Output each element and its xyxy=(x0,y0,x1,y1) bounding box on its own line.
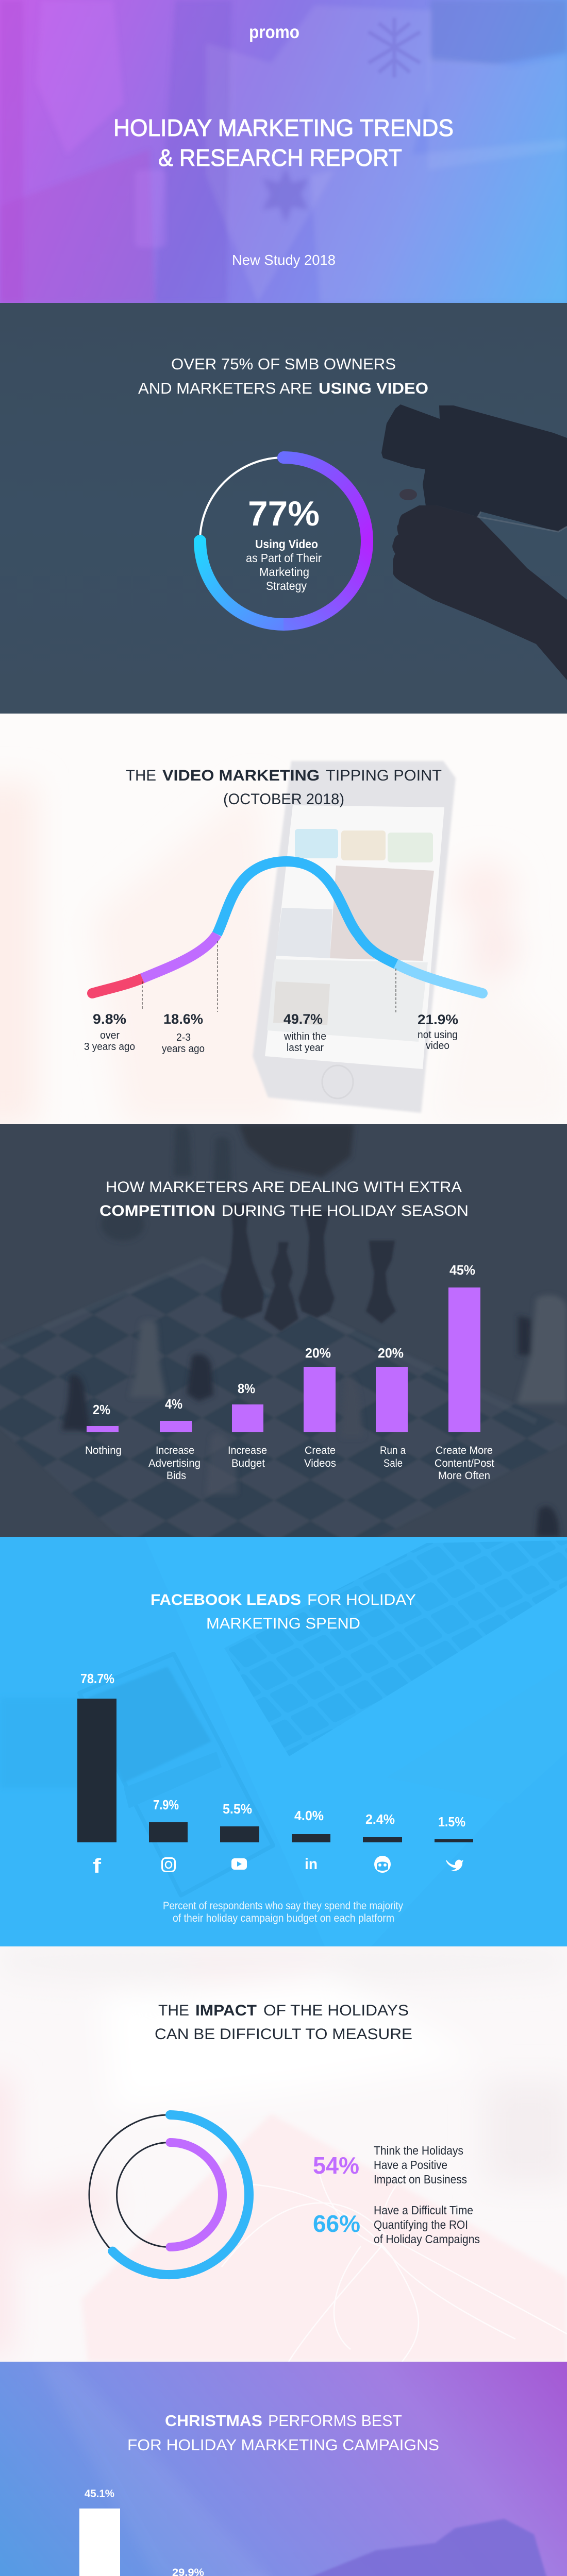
heading: FOR HOLIDAY MARKETING CAMPAIGNS xyxy=(127,2436,439,2454)
panel: impact of the holidays xyxy=(0,1946,567,2362)
bar: Increase Budget 8%: Increase xyxy=(228,1445,267,1456)
bar: Increase Budget 8% xyxy=(228,1381,267,1469)
background photo of chess board xyxy=(0,1124,567,1540)
stat: 66%: Quantifying the ROI xyxy=(374,2218,468,2231)
heading: USING VIDEO xyxy=(319,379,428,397)
donut chart: 77%: Strategy xyxy=(266,579,307,592)
background xyxy=(0,303,567,714)
bar: Create More Content/Post More Often 45%: More Often xyxy=(438,1470,490,1482)
bar: Nothing 2%: 2% xyxy=(93,1402,110,1417)
bar: Create Videos 20%: Videos xyxy=(304,1458,336,1469)
title: & RESEARCH REPORT xyxy=(158,144,402,171)
bar chart xyxy=(77,1671,473,1842)
heading: TIPPING POINT xyxy=(326,767,442,784)
heading: THE xyxy=(126,767,156,784)
heading xyxy=(138,355,428,397)
bar: Nothing 2%: Nothing xyxy=(85,1445,122,1456)
bar: Run a Sale 20%: Run a xyxy=(380,1445,406,1456)
icon: glasses face xyxy=(374,1856,391,1873)
concentric ring chart xyxy=(89,2115,249,2275)
bar: twitter 1.5% xyxy=(435,1814,473,1842)
heading: THE xyxy=(158,2002,189,2019)
heading: OVER 75% OF SMB OWNERS xyxy=(171,355,396,373)
panel: facebook leads xyxy=(0,1537,567,1946)
stat: 49.7%: last year xyxy=(287,1042,324,1054)
heading: PERFORMS BEST xyxy=(268,2412,402,2430)
stat: 18.6% xyxy=(162,1011,205,1055)
panel: extra competition xyxy=(0,1124,567,1537)
heading: (OCTOBER 2018) xyxy=(223,791,344,808)
stat: 66% xyxy=(313,2204,480,2246)
heading xyxy=(126,767,442,808)
title xyxy=(113,114,454,171)
bar: facebook 78.7%: 78.7% xyxy=(80,1671,114,1686)
bar: Create More Content/Post More Often 45%: Content/Post xyxy=(435,1458,494,1469)
bar: instagram 7.9% xyxy=(149,1797,188,1842)
bar: Create More Content/Post More Often 45% xyxy=(435,1262,494,1482)
bar: Increase Advertising Bids 4%: 4% xyxy=(165,1396,182,1412)
donut chart: 77%: Marketing xyxy=(259,565,309,579)
bar: facebook 78.7% xyxy=(77,1671,116,1842)
bar: Run a Sale 20% xyxy=(376,1345,408,1469)
panel: video usage xyxy=(0,303,567,714)
heading xyxy=(155,2002,412,2043)
icon: twitter xyxy=(446,1860,463,1871)
heading xyxy=(99,1179,469,1219)
bar chart xyxy=(85,1262,494,1482)
stat: 66%: of Holiday Campaigns xyxy=(374,2232,480,2246)
stat: 54%: Impact on Business xyxy=(374,2173,467,2186)
bar: Run a Sale 20%: 20% xyxy=(378,1345,404,1361)
stat: 49.7%: 49.7% xyxy=(284,1011,323,1027)
bar: youtube 5.5%: 5.5% xyxy=(223,1801,252,1817)
heading: CAN BE DIFFICULT TO MEASURE xyxy=(155,2026,412,2043)
background photo of gifts xyxy=(0,1946,567,2362)
hero background photo of shopping bags xyxy=(0,0,567,303)
caption: of their holiday campaign budget on each platform xyxy=(173,1912,394,1924)
stat: 9.8%: 9.8% xyxy=(93,1011,126,1027)
icon: linkedin: in xyxy=(305,1856,318,1873)
bar: instagram 7.9%: 7.9% xyxy=(153,1797,179,1812)
stat: 54%: 54% xyxy=(313,2152,359,2179)
bar: Nothing 2% xyxy=(85,1402,122,1456)
donut chart: 77%: as Part of Their xyxy=(246,551,322,565)
bar: Christmas 45.1%: 45.1% xyxy=(85,2488,114,2500)
caption xyxy=(163,1900,403,1924)
bar: twitter 1.5%: 1.5% xyxy=(438,1814,465,1829)
icon: instagram xyxy=(162,1858,175,1871)
logo: promo: promo xyxy=(249,22,299,42)
heading xyxy=(127,2412,439,2454)
background photo of laptop and phone xyxy=(0,1537,567,1946)
heading: CHRISTMAS xyxy=(165,2412,262,2430)
bar: Increase Budget 8%: Budget xyxy=(231,1458,265,1469)
bar: Create Videos 20%: Create xyxy=(305,1445,336,1456)
donut chart: 77% xyxy=(200,457,367,624)
bar: Increase Advertising Bids 4%: Bids xyxy=(166,1470,186,1482)
heading: MARKETING SPEND xyxy=(206,1615,360,1632)
stat: 54%: Have a Positive xyxy=(374,2158,447,2172)
icon: facebook: f xyxy=(93,1855,102,1877)
stat: 21.9% xyxy=(418,1012,458,1052)
bar: Create Videos 20%: 20% xyxy=(305,1345,331,1361)
bar: Increase Budget 8%: 8% xyxy=(238,1381,255,1396)
heading: DURING THE HOLIDAY SEASON xyxy=(222,1202,469,1219)
heading: HOW MARKETERS ARE DEALING WITH EXTRA xyxy=(106,1179,462,1196)
stat: 66%: Have a Difficult Time xyxy=(374,2204,473,2217)
icon: youtube xyxy=(231,1858,247,1870)
bar: linkedin 4.0% xyxy=(292,1808,330,1842)
stat: 9.8%: 3 years ago xyxy=(84,1041,135,1053)
stat: 21.9%: 21.9% xyxy=(418,1012,458,1027)
stat: 49.7%: within the xyxy=(284,1031,326,1042)
heading: FACEBOOK LEADS xyxy=(151,1591,301,1608)
bar: Increase Advertising Bids 4%: Increase xyxy=(156,1445,194,1456)
bar: Increase Advertising Bids 4%: Advertising xyxy=(148,1458,201,1469)
heading: VIDEO MARKETING xyxy=(162,767,320,784)
bar: outdoor 2.4% xyxy=(363,1811,402,1842)
bar: Create More Content/Post More Often 45%: 45% xyxy=(449,1262,475,1278)
bar: linkedin 4.0%: 4.0% xyxy=(294,1808,324,1823)
bar: Run a Sale 20%: Sale xyxy=(383,1458,403,1469)
stat: 49.7% xyxy=(284,1011,326,1054)
bar chart xyxy=(76,2488,488,2576)
bar: outdoor 2.4%: 2.4% xyxy=(365,1811,395,1827)
stat: 21.9%: video xyxy=(426,1040,449,1052)
stat: 54%: Think the Holidays xyxy=(374,2144,463,2157)
stat: 54% xyxy=(313,2144,467,2186)
heading: IMPACT xyxy=(195,2002,257,2019)
camera and hand silhouette xyxy=(381,404,567,680)
background photo of van with tree xyxy=(0,2362,567,2576)
panel: christmas performs best xyxy=(0,2362,567,2576)
stat: 21.9%: not using xyxy=(418,1029,458,1041)
stat: 18.6%: 2-3 xyxy=(176,1032,191,1043)
stat: 18.6%: 18.6% xyxy=(163,1011,203,1027)
background photo of phone in hand xyxy=(0,714,567,1124)
heading xyxy=(151,1591,416,1632)
bar: Christmas 45.1% xyxy=(76,2488,121,2576)
title: HOLIDAY MARKETING TRENDS xyxy=(113,114,454,141)
bar: Create Videos 20% xyxy=(304,1345,336,1469)
heading: OF THE HOLIDAYS xyxy=(263,2002,409,2019)
stat: 18.6%: years ago xyxy=(162,1043,205,1055)
panel: hero header xyxy=(0,0,567,303)
donut chart: 77%: 77% xyxy=(248,494,320,533)
stat: 9.8% xyxy=(84,1011,135,1053)
bar: Increase Advertising Bids 4% xyxy=(148,1396,201,1482)
stat: 66%: 66% xyxy=(313,2210,360,2237)
donut chart: 77%: Using Video xyxy=(255,537,318,551)
bar: Create More Content/Post More Often 45%: Create More xyxy=(436,1445,493,1456)
heading: COMPETITION xyxy=(99,1202,215,1219)
subtitle: New Study 2018 xyxy=(232,252,336,268)
bell curve chart xyxy=(92,861,482,1012)
heading: AND MARKETERS ARE xyxy=(138,379,312,397)
panel: video marketing tipping point xyxy=(0,760,561,1124)
stat: 9.8%: over xyxy=(100,1030,120,1041)
heading: FOR HOLIDAY xyxy=(307,1591,416,1608)
caption: Percent of respondents who say they spend the majority xyxy=(163,1900,403,1912)
bar: youtube 5.5% xyxy=(220,1801,259,1842)
